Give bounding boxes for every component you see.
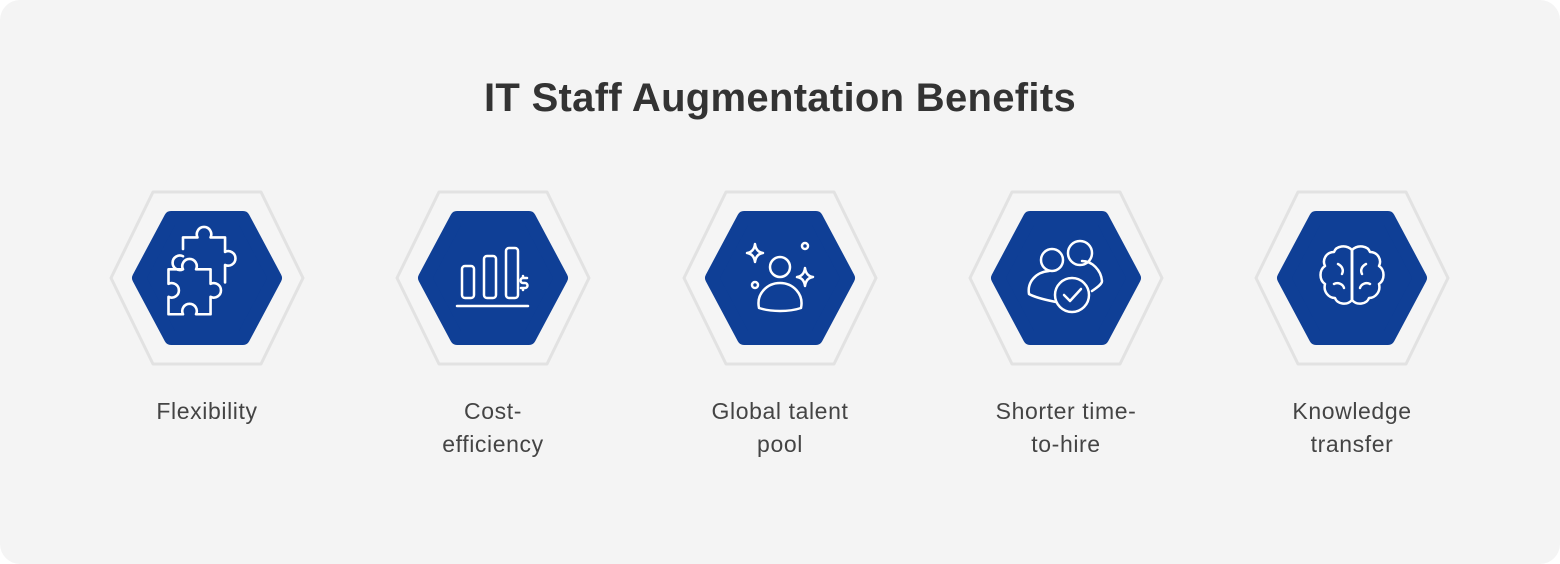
label: Global talent pool: Global talent <box>712 398 848 424</box>
title: IT Staff Augmentation Benefits <box>484 76 1076 120</box>
icon: team with check (Shorter time-to-hire) <box>970 192 1162 364</box>
label: Global talent pool <box>712 398 848 457</box>
label: Cost-efficiency: efficiency <box>442 431 544 457</box>
icon: puzzle (Flexibility) <box>111 192 303 364</box>
label: Shorter time-to-hire: Shorter time- <box>996 398 1136 424</box>
label: Shorter time-to-hire <box>996 398 1136 457</box>
icon: bar chart with dollar (Cost-efficiency) <box>397 192 589 364</box>
icon: brain (Knowledge transfer) <box>1256 192 1448 364</box>
label: Knowledge transfer: transfer <box>1311 431 1393 457</box>
label: Knowledge transfer: Knowledge <box>1292 398 1412 424</box>
label: Flexibility: Flexibility <box>156 398 258 424</box>
label: Cost-efficiency <box>442 398 544 457</box>
label: Cost-efficiency: Cost- <box>464 398 522 424</box>
label: Global talent pool: pool <box>757 431 803 457</box>
label: Shorter time-to-hire: to-hire <box>1031 431 1101 457</box>
label: Knowledge transfer <box>1292 398 1412 457</box>
icon: person with sparkles (Global talent pool) <box>684 192 876 364</box>
